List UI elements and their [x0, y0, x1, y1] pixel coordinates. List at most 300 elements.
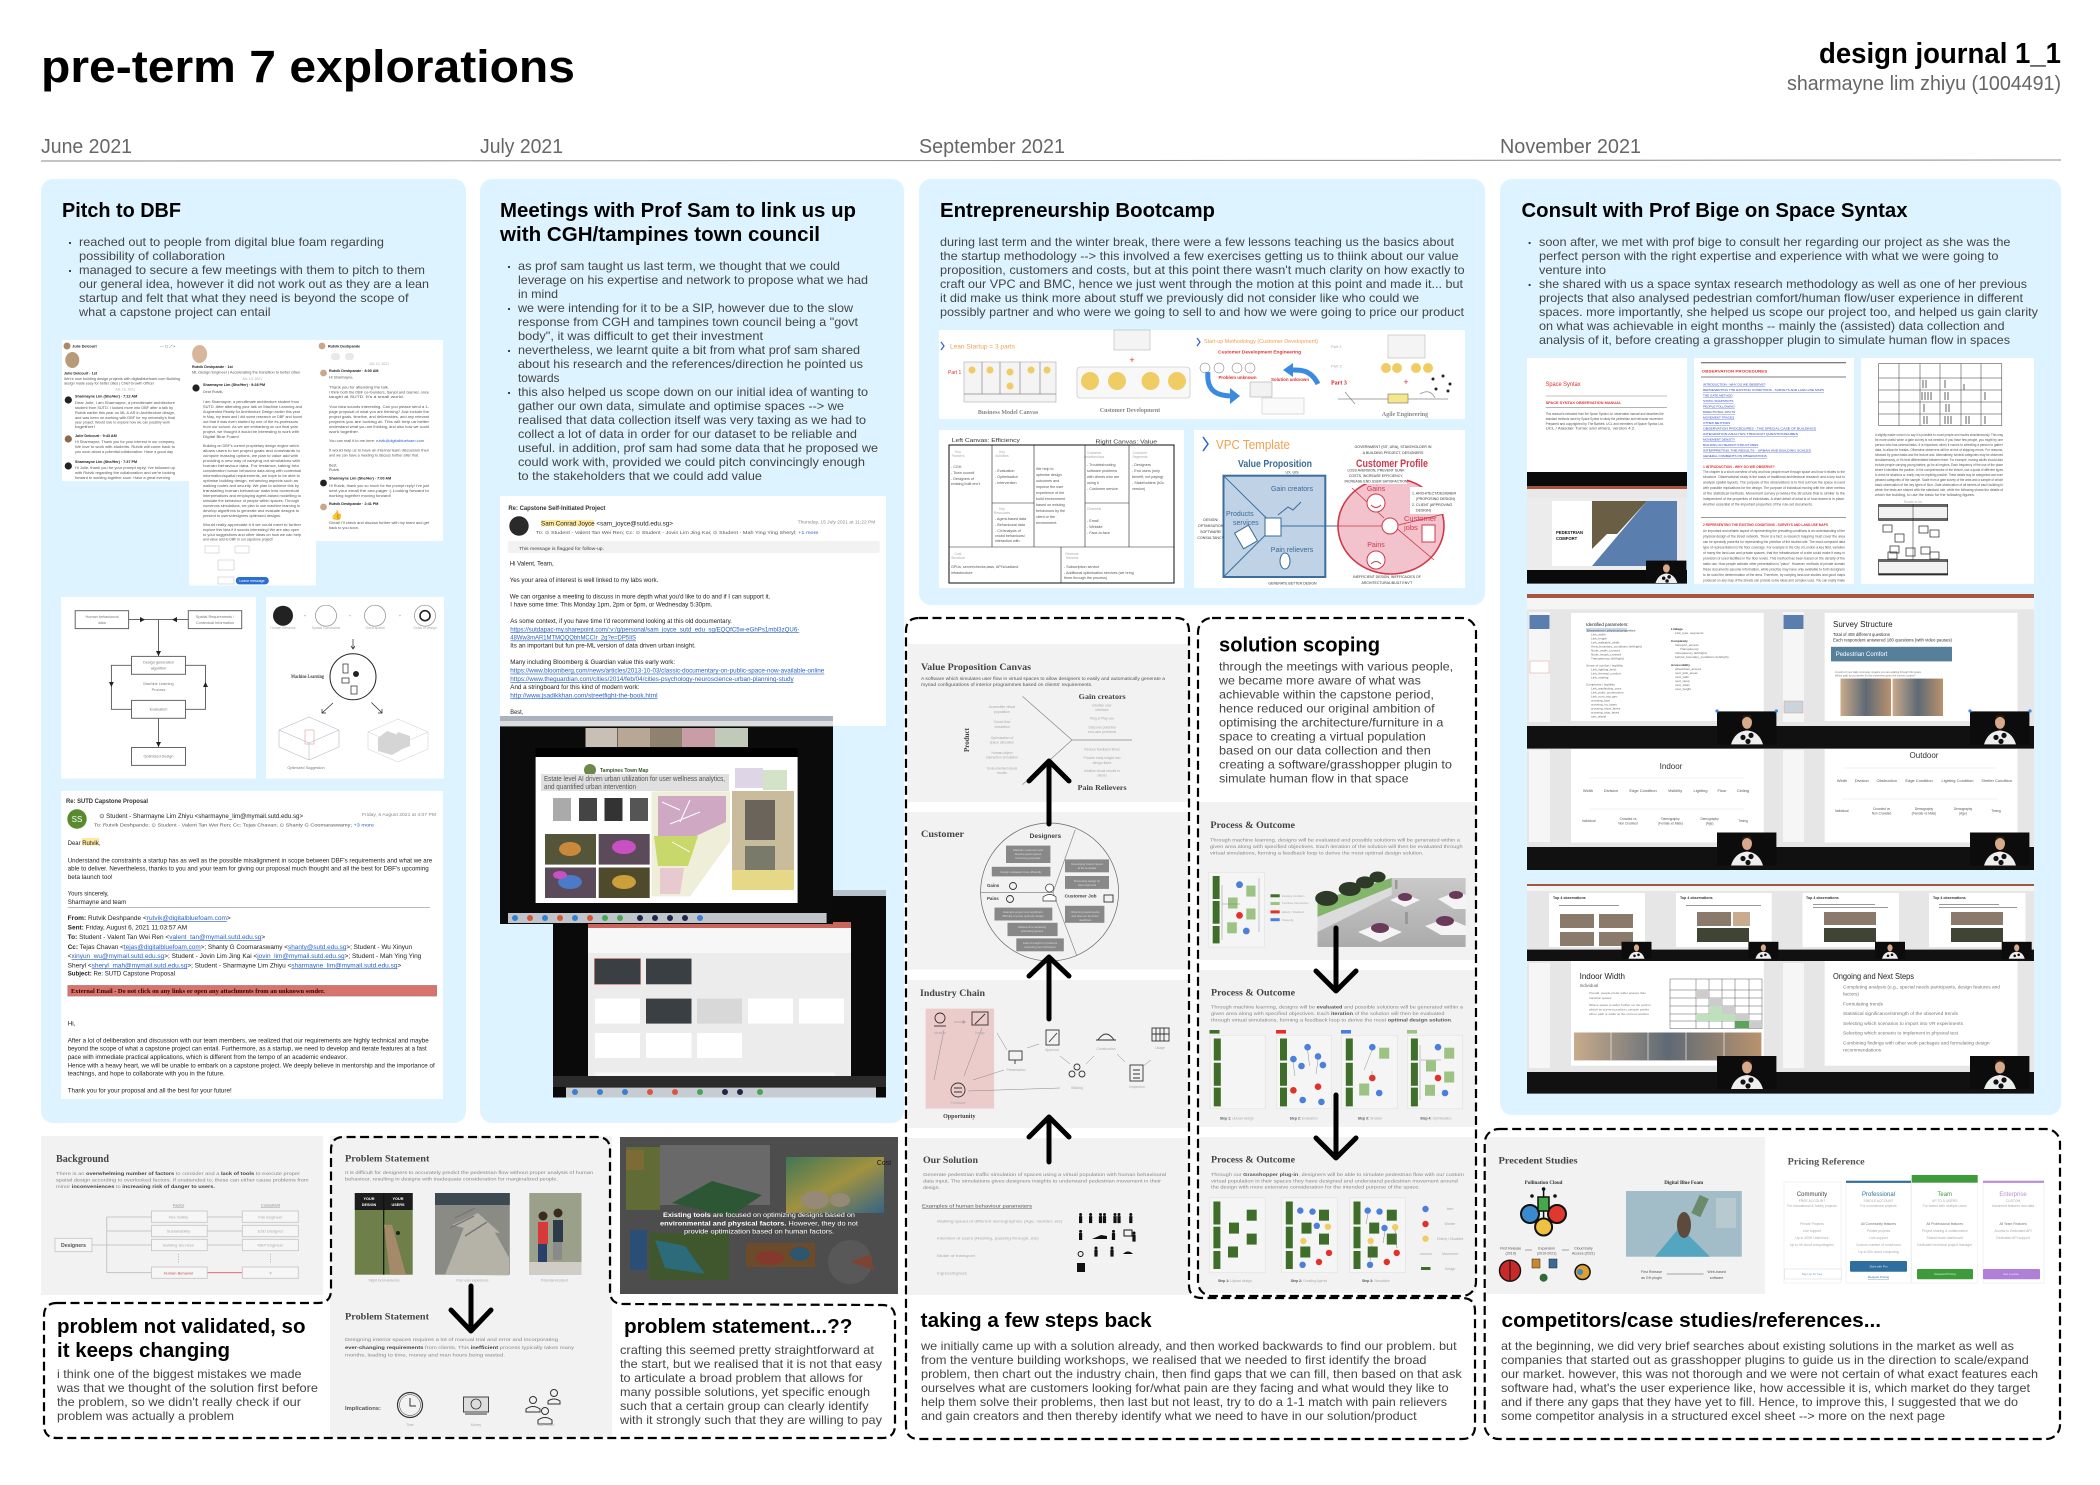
screenshot: zoom meeting Tampines: Tampines Town Map	[600, 768, 648, 774]
slide: problem statement	[330, 1136, 612, 1438]
slide: value proposition canvas template: Products	[1226, 511, 1254, 518]
linkedin message screenshot 2: I am Sharmayne, a penultimate architecture student from	[203, 400, 299, 404]
slide: background: Building Services	[163, 1242, 194, 1248]
email: SUTD Capstone Proposal	[61, 791, 443, 1099]
slide: business model canvas: experience of the	[1036, 491, 1064, 495]
slide: business model canvas: software problems	[1087, 469, 1117, 473]
linkedin message screenshot 2: walking routes and security. We plan to achieve this by	[203, 484, 299, 488]
slide: value proposition canvas template: INEFFICIENT DESIGN, INEFFICACIES OF	[1353, 575, 1421, 579]
timeline: September 2021	[919, 136, 1065, 158]
slide: background: Designers	[61, 1243, 86, 1249]
slide: background: ?	[269, 1270, 272, 1276]
slide: business model canvas: Customer	[1133, 451, 1148, 455]
linkedin message screenshot 2: information/spatial requirements, we hope to be able to	[203, 474, 300, 478]
text block: competitors: some competitor analysis in a structured excel sheet --> more on the next page	[1501, 1409, 1945, 1423]
linkedin message screenshot 3	[316, 340, 443, 541]
text block: problem statement: many possible solutions, yet specific enough	[620, 1385, 870, 1399]
slide: industry chain: Construction	[1096, 1047, 1116, 1051]
slide: value proposition canvas template: Gains	[1367, 486, 1386, 493]
text block: solution scoping: based on our data collection and then	[1219, 744, 1431, 758]
slide: outdoor variables: Division	[1855, 778, 1869, 783]
slide: business model canvas: - Behavioural data	[995, 523, 1026, 527]
text block: taking a few steps back: we initially came up with a solution already, and then worked backwards to find our problem. but	[920, 1339, 1457, 1353]
document: table and plan diagrams: where it identifies the position. In the comprehensive of the lecture, use a quota of different types	[1875, 468, 2003, 472]
email: SUTD Capstone Proposal: Sent: Friday, August 6, 2021 11:03:57 AM	[68, 924, 187, 932]
slide: problem statement: months, leading to time, money and man hours being wasted.	[345, 1352, 505, 1358]
document: space syntax manual cover with presentation: This manual is extracted from the Space Syntax Ltd. observation manual and describes the	[1546, 412, 1664, 416]
document: observation procedures contents: REPRESENTING THE EXISTING CONDITIONS - SURVEYS AND LAND-USE MAPS	[1703, 388, 1824, 392]
email: Capstone Self-Initiated Project: This message is flagged for follow-up.	[519, 546, 604, 552]
document: space syntax manual cover with presentation: Space Syntax	[1546, 382, 1581, 388]
email: Capstone Self-Initiated Project: https://sutdapac-my.sharepoint.com/:v:/g/personal/sam_joyce_sutd_edu_sg/EQQfC5w-eGhPs1mbl3zQU6-	[510, 626, 799, 633]
slide: customer: fixed long proposals	[1016, 856, 1041, 860]
slide: process and outcome 1: Through machine learning, designs will be evaluated and possible solutions will be generated within a	[1210, 837, 1460, 842]
text block: problem statement: with it strongly such that they are willing to pay	[619, 1413, 882, 1427]
bullet text	[508, 259, 878, 483]
slide: value proposition canvas: Plug & Play use	[1090, 716, 1114, 720]
email: SUTD Capstone Proposal: ⊙ Student - Sharmayne Lim Zhiyu <sharmayne_lim@mymail.sutd.edu.sg>	[99, 813, 303, 820]
flowchart: design process: Machine Learning	[143, 682, 174, 686]
slide: process and outcome 3: the design with more extensive consideration for the intended purpose of the space.	[1211, 1185, 1420, 1190]
slide: business model canvas: Revenue	[1065, 552, 1079, 556]
slide: process and outcome 2: Through machine learning, designs will be evaluated and possible solutions will be generated within a	[1211, 1005, 1463, 1010]
slide: identified parameters: Sense of comfort / legibility	[1586, 664, 1623, 668]
slide: value proposition canvas: Product	[963, 727, 971, 752]
slide: existing tools image	[620, 1137, 898, 1294]
linkedin message screenshot 3: understand what you are thinking, and also how we could	[329, 425, 429, 429]
pricing reference: Up to 50h cloud computing	[1858, 1250, 1899, 1254]
slide: precedent studies: software	[1710, 1276, 1723, 1280]
pricing reference: Advanced features and data	[1992, 1204, 2034, 1208]
linkedin message screenshot 3: and we can have a meeting to discuss further after that.	[329, 454, 419, 458]
bullet text: reached out to people from digital blue foam regarding	[79, 235, 384, 249]
slide: value proposition canvas: clients	[1097, 774, 1107, 778]
machine learning diagram: Machine Learning	[291, 675, 324, 680]
email: SUTD Capstone Proposal: Sheryl <sheryl_mah@mymail.sutd.edu.sg>; Student - Sharmayne Lim Zhiyu <sharmayne_lim@mymail.sutd.edu.sg>	[68, 962, 401, 969]
slide: business model canvas: We help to	[1036, 467, 1054, 471]
text block: problem not validated: problem not validated, so	[57, 1316, 306, 1338]
slide: industry chain: Approval	[1045, 1048, 1059, 1052]
pricing reference: Project sharing & collaboration	[1922, 1229, 1968, 1233]
slide: value proposition canvas: simulation	[994, 725, 1010, 729]
document: observation procedures contents: of many the land-use and private spaces, that the infrastructure of a site could make it easy in	[1703, 551, 1845, 555]
document: observation procedures contents: with possible implications for the design. The purpose of individual moving with the other metrics	[1703, 486, 1845, 490]
linkedin message screenshot 2: explore this idea if it sounds interesting! We are also open	[203, 528, 299, 532]
flowchart: design process: Spatial Requirements /	[196, 615, 235, 619]
slide: business model canvas: Key	[999, 450, 1005, 454]
slide: outdoor variables: (Female vs Male)	[1912, 812, 1936, 816]
slide: business model canvas: optimise design	[1036, 473, 1062, 477]
slide: identified parameters: next_height	[1675, 687, 1691, 691]
email: SUTD Capstone Proposal: Re: SUTD Capstone Proposal	[66, 798, 148, 805]
paragraph: possibly partner and who were we going to sell to and how we were going to price our product	[940, 305, 1465, 319]
slide: business model canvas: Segments	[1132, 455, 1148, 459]
slide: process and outcome 1: Passerby	[1282, 918, 1294, 922]
slide: identified parameters: Node_width_crossed	[1591, 648, 1620, 652]
document: table and plan diagrams: person who has several tasks. It is important, when it comes to selecting a person to gather	[1875, 443, 2004, 447]
bullet text: useful. in addition, prof sam had some data that he proposed we	[518, 441, 878, 455]
slide: process and outcome 3: Item	[1447, 1207, 1453, 1211]
linkedin message screenshot 2: translating human behaviour data into numerical	[203, 489, 299, 493]
slide: customer: at the template	[1078, 866, 1097, 870]
paragraph: craft our VPC and BMC, hence we just went through the motion at this point and made it... but	[940, 277, 1464, 291]
slide: identified parameters: Link_seating	[1591, 676, 1609, 680]
slide: background: spatial design according to overlooked factors. If unattended to, these can either cause problems from	[56, 1178, 309, 1184]
slide: value proposition canvas: interface	[1095, 708, 1109, 712]
linkedin message screenshot 2: Dear Rutvik,	[203, 390, 223, 394]
slide: lean startup methodology: +	[1129, 355, 1135, 365]
flowchart: design process: Optimized Design	[144, 754, 173, 758]
slide: value proposition canvas template: SOFTWARE/	[1200, 530, 1221, 534]
slide: our solution: Mode of transport	[937, 1254, 975, 1258]
slide: problem statement: Slight inconvenience	[368, 1278, 400, 1282]
slide: identified parameters: Accessibility	[1671, 663, 1690, 667]
slide: identified parameters: transport_access	[1675, 643, 1699, 647]
slide: customer: difficulty to prove optimum design	[1002, 914, 1044, 918]
linkedin message screenshot 2: allows users to set project goals and constraints to	[203, 449, 300, 453]
email: SUTD Capstone Proposal: beta launch too!	[68, 874, 113, 881]
document: observation procedures contents: these documents assume information, while practice may have only available to both designers	[1703, 568, 1845, 572]
machine learning diagram: +	[304, 614, 307, 618]
slide: outdoor variables	[1835, 751, 2012, 816]
slide: indoor width: transition spaces	[1589, 996, 1612, 1000]
slide: value proposition canvas template: ARCHITECTURAL/BUILT ENV'T	[1362, 581, 1413, 585]
linkedin message screenshot 1: design made easy for better cities | Chief Growth Officer	[64, 382, 155, 386]
bullet text: venture into	[1539, 263, 1606, 277]
slide: business model canvas: Cost	[955, 552, 962, 556]
slide: business model canvas: - CGH	[951, 465, 962, 469]
document: space syntax manual cover with presentation: PEDESTRIAN	[1556, 530, 1583, 535]
pricing reference: Access to Dedicated API	[1994, 1229, 2032, 1233]
pricing reference: Shared team dashboard	[1927, 1236, 1963, 1240]
slide: lean startup methodology: Lean Startup = 3 parts	[950, 344, 1016, 350]
slide: value proposition canvas template: UX, UIS	[1286, 470, 1299, 474]
slide: process and outcome 3: Worker	[1445, 1222, 1456, 1226]
slide: identified parameters: wheelchair_access	[1675, 667, 1702, 671]
slide: business model canvas: - Agent-based data	[995, 517, 1027, 521]
slide: value proposition canvas template: (PROPOSING DESIGN)	[1416, 497, 1455, 501]
slide: lean startup methodology: Customer Development Engineering	[1218, 350, 1301, 356]
slide: our solution: Our Solution	[923, 1155, 978, 1165]
pricing reference: Enterprise	[1999, 1192, 2027, 1198]
document: table and plan diagrams: be more useful when a gate survey is not needed. If you have few people, you might try one	[1875, 438, 2003, 442]
slide: ongoing and next steps: Ongoing and Next Steps	[1833, 972, 1914, 981]
document: table and plan diagrams: data, to allow for breaks. Otherwise observers will be at risk of skipping errors. For reasons,	[1875, 448, 2003, 452]
slide: customer: optimising spaces	[1021, 929, 1044, 933]
slide: indoor variables: Individual	[1582, 819, 1596, 823]
email: Capstone Self-Initiated Project: https://www.bloomberg.com/news/articles/2013-10-03/classic-documentary-on-public-space-now-available-online	[510, 668, 825, 675]
slide: indoor variables: Width	[1583, 788, 1593, 793]
pricing reference: For educational & hobby projects	[1787, 1204, 1837, 1208]
document: observation procedures contents: independent of the properties of individuals. A chart detail of what is of how drawn is in place.	[1703, 497, 1845, 501]
text block: problem statement: crafting this seemed pretty straightforward at	[620, 1343, 875, 1357]
slide: value proposition canvas template: OPTIMISATION	[1198, 524, 1224, 528]
pricing reference: All Team Features	[1999, 1222, 2027, 1226]
paragraph: the startup methodology --> this involved a few exercises getting us to thiink about our value	[940, 249, 1459, 263]
slide: value proposition canvas: Gain creators	[1079, 693, 1126, 701]
pricing reference: FREE ACCOUNT	[1799, 1199, 1825, 1203]
slide: problem statement: Problem Statement	[345, 1311, 429, 1321]
text block: solution scoping: simulate human flow in that space	[1219, 772, 1409, 786]
linkedin message screenshot 2: project, we thought it would be interesting to work with	[203, 430, 299, 434]
slide: business model canvas: outcomes and	[1036, 479, 1059, 483]
slide: business model canvas: Partners	[952, 454, 965, 458]
slide: process and outcome 1: Elderly / Disabled	[1282, 910, 1304, 914]
email: Capstone Self-Initiated Project: Yes your area of interest is well linked to my labs work.	[510, 577, 659, 584]
slide: identified parameters: Transparency (left/right)	[1591, 656, 1624, 660]
linkedin message screenshot 2: numerous simulations, we plan to use machine learning to	[203, 504, 300, 508]
slide: identified parameters: Link_wayfinding_cues	[1591, 686, 1622, 690]
slide: background: ESD Designer	[258, 1228, 284, 1234]
slide: lean startup methodology: Part 3	[1331, 380, 1347, 386]
slide: background: Consultant	[261, 1202, 281, 1208]
slide: business model canvas: - Face-to-face	[1087, 531, 1110, 535]
slide: business model canvas: with clients who are	[1087, 475, 1119, 479]
slide: survey structure: Which path do you prefer for the movement given the current context?	[1835, 674, 1916, 678]
timeline	[41, 136, 2061, 161]
presentation screenshots: survey parameters	[1527, 594, 2034, 870]
bullet text: analysis of it, before creating a grasshopper plugin to simulate human flow in spaces	[1539, 333, 2010, 347]
document: space syntax manual cover with presentation: Prepared and copyrighted by The Bartlett, UCL and members of Space Syntax Ltd.	[1546, 422, 1664, 426]
bullet text	[69, 235, 429, 319]
linkedin message screenshot 2: providing a new way of carrying out simulations with	[203, 459, 300, 463]
bullet text: projects that also analysed pedestrian comfort/human flow/user experience in different	[1539, 291, 2024, 305]
slide: identified parameters: Link_point_construction	[1591, 690, 1624, 694]
bullet text: this also helped us scope down on our initial idea of wanting to	[518, 385, 868, 399]
slide: precedent studies: as GH plugin	[1641, 1276, 1662, 1280]
text block: competitors: competitors/case studies/references...	[1502, 1310, 1881, 1332]
linkedin message screenshot 2: compute massing options, we plan to value add with	[203, 454, 298, 458]
flowchart: design process: Design generation	[143, 660, 174, 664]
subtitle: design journal: design journal 1_1	[1819, 38, 2061, 70]
slide: business model canvas: crowd behaviours/	[995, 534, 1026, 538]
linkedin message screenshot 2: Augmented Reality for Architecture Design earlier this year	[203, 410, 301, 414]
linkedin message screenshot 3: Sharmayne Lim (She/Her) · 7:00 AM	[329, 476, 391, 480]
slide: lean startup methodology: Problem unknown	[1218, 375, 1257, 380]
pricing reference: Custom number of runs/hours	[1856, 1243, 1901, 1247]
bullet text: body", it was difficult to get their investment	[518, 329, 764, 343]
flowchart: design process: algorithm	[151, 666, 166, 670]
slide: value proposition canvas: end-user problems	[1088, 730, 1116, 734]
slide: our solution: data input. The simulations gives designers insights to understand pedestrian movement in their	[923, 1178, 1162, 1184]
email: Capstone Self-Initiated Project: Re: Capstone Self-Initiated Project	[508, 506, 605, 512]
email: SUTD Capstone Proposal: External Email - Do not click on any links or open any attachments from an unknown sender.	[71, 988, 325, 995]
slide: outdoor variables: Width	[1837, 778, 1847, 783]
text block: solution scoping	[1218, 634, 1453, 786]
screenshot: zoom slide deck	[553, 890, 886, 1098]
document: observation procedures contents: MOVEMENT DENSITY	[1703, 438, 1735, 442]
slide: identified parameters: Link_lighting_level	[1591, 668, 1617, 672]
slide: identified parameters: Link_walkable_width	[1591, 640, 1620, 644]
linkedin message screenshot 3: Rutvik Deshpande	[328, 344, 360, 348]
slide: identified parameters: Link_type, segments	[1675, 631, 1704, 635]
slide: process and outcome 3	[1198, 1137, 1476, 1293]
slide: process and outcome 3: Through our Grasshopper plug-in , designers will be able to simulate pedestrian flow with our custom	[1211, 1172, 1464, 1177]
flowchart: design process: Evaluation	[150, 708, 167, 712]
slide: indoor width: Indoor Width	[1580, 972, 1625, 981]
email: Capstone Self-Initiated Project: Many including Bloomberg & Guardian value this early work:	[510, 659, 675, 666]
slide: customer: develop great spaces	[1015, 852, 1042, 856]
text block: taking a few steps back: ourselves what are customers looking for/what pain are they facing and what would they like to	[921, 1381, 1449, 1395]
bullet text: could work with, provided we could pitch convincingly enough	[518, 455, 865, 469]
linkedin message screenshot 2: Sharmayne Lim (She/Her) · 9:28 PM	[203, 383, 265, 387]
slide: value proposition canvas template: GOVERNMENT (SIT, URA), STAKEHOLDER IN	[1355, 445, 1432, 449]
text block: competitors: software had, what's the user experience like, how accessible it is, which market do they target	[1501, 1381, 2031, 1395]
linkedin message screenshot 2: and value add to DBF in our capstone project!	[203, 538, 273, 542]
document: space syntax manual cover with presentation: UCL / Alasdair Turner and others, version 4.2.	[1546, 426, 1636, 430]
slide: lean startup methodology: Part 2	[1331, 364, 1342, 368]
pricing reference	[1765, 1137, 2053, 1294]
slide: value proposition canvas: Discover potential	[1089, 726, 1116, 730]
bullet text: soon after, we met with prof bige to consult her regarding our project as she was the	[1539, 235, 2011, 249]
slide: our solution: Examples of human behaviour parameters	[922, 1204, 1033, 1208]
slide: business model canvas: Key	[955, 450, 961, 454]
text block: competitors	[1501, 1310, 2038, 1423]
machine learning diagram: Good spatial	[365, 626, 385, 630]
email: SUTD Capstone Proposal: able to deliver. Nevertheless, thanks to you and your team for giving our proposal much thought and all the best for DBF's upcoming	[68, 866, 429, 873]
slide: outdoor variables: Demography	[1954, 807, 1973, 811]
slide: value proposition canvas template: COSTS, INCREASE EFFICIENCY,	[1349, 474, 1403, 478]
timeline: June 2021	[41, 136, 132, 158]
slide: process and outcome 3: Movement	[1442, 1252, 1458, 1256]
slide: lean startup methodology: Customer Development	[1100, 408, 1160, 414]
slide: background	[41, 1136, 323, 1295]
email: SUTD Capstone Proposal: SS	[72, 815, 82, 824]
email: Capstone Self-Initiated Project	[500, 496, 886, 726]
slide: outdoor variables: Non Crowded	[1872, 812, 1892, 816]
slide: value proposition canvas template: 1. ARCHITECT/DESIGNER	[1412, 492, 1457, 496]
slide: problem statement: Potential Accident	[541, 1278, 568, 1282]
text block: taking a few steps back: taking a few steps back	[921, 1310, 1153, 1332]
slide: background: There is an overwhelming number of factors to consider and a lack of tools to execute proper	[56, 1171, 300, 1177]
slide: value proposition canvas: Reduce feedback times	[1084, 748, 1120, 752]
email: SUTD Capstone Proposal: Subject: Re: SUTD Capstone Proposal	[68, 971, 175, 978]
linkedin message screenshot 2	[189, 340, 316, 586]
slide: existing tools image: Cost	[877, 1160, 891, 1167]
linkedin message screenshot 1: We love to work with students. Rutvik will come back to	[75, 445, 175, 449]
slide: outdoor variables: Lighting Condition	[1941, 778, 1974, 783]
slide: value proposition canvas template: Pain relievers	[1271, 547, 1314, 554]
pricing reference: Live support	[1869, 1236, 1888, 1240]
bullet text: leverage on his expertise and network to propose what we had	[518, 273, 868, 287]
timeline: July 2021	[480, 136, 563, 158]
paragraph: it did make us think more about stuff we previously did not consider like who could we	[940, 291, 1419, 305]
linkedin message screenshot 3: Thank you for attending the talk.	[329, 386, 389, 390]
slide: precedent studies: First Release	[1641, 1270, 1662, 1274]
slide: business model canvas: Right Canvas: Value	[1096, 440, 1157, 446]
slide: value proposition canvas template: VPC Template	[1216, 437, 1290, 452]
slide: process and outcome 1: given area along with specified objectives. Each iteration of the solution will then be evaluated through	[1210, 844, 1463, 849]
text block: solution scoping: through the meetings with various people,	[1219, 660, 1453, 674]
pricing reference: Professional	[1862, 1192, 1895, 1198]
slide: business model canvas: environment.	[1036, 521, 1057, 525]
slide: identified parameters: next_walk	[1675, 675, 1689, 679]
linkedin message screenshot 1: student from SUTD. I looked more into DBF after a talk by	[75, 406, 173, 410]
email: SUTD Capstone Proposal: Cc: Tejas Chavan <tejas@digitalbluefoam.com>; Shanty G Coomaraswamy <shanty@sutd.edu.sg>; Student - Wu Xinyun	[68, 944, 413, 951]
dashed outline: competitors group	[1485, 1129, 2060, 1439]
linkedin message screenshot 1: Julie Delcourt	[72, 344, 97, 348]
presentation screenshots: observations and next steps: Top 4 observations	[1806, 896, 1839, 900]
slide: problem statement: It is difficult for designers to accurately predict the pedestrian flow without proper analysis of human	[345, 1170, 593, 1176]
linkedin message screenshot 3: Rutvik Deshpande · 8:00 AM	[329, 369, 378, 373]
slide: business model canvas: - Evaluation	[995, 469, 1014, 473]
slide: customer: Pains	[987, 896, 999, 901]
heading: with CGH/tampines town council	[499, 224, 820, 246]
email: SUTD Capstone Proposal: beyond the scope of what a capstone project can entail. Furthermore, as a startup, we need to develop and iterate features at a fast	[68, 1046, 427, 1053]
linkedin message screenshot 3: Rutvik	[329, 468, 339, 472]
machine learning diagram: Human Behavior	[270, 626, 296, 630]
slide: identified parameters: next_ramp	[1675, 679, 1690, 683]
linkedin message screenshot 3: project goals, timeline, and deliverables, and any relevant	[329, 415, 429, 419]
presentation screenshots: observations and next steps	[1527, 884, 2034, 1094]
slide: business model canvas: GPUs, server/checks,laws, API's/cadland	[951, 565, 1018, 569]
slide: lean startup methodology: Solution unknown	[1271, 377, 1309, 382]
slide: process and outcome 2: Step 4: Optimisation	[1420, 1116, 1451, 1120]
slide: value proposition canvas: space allocation	[990, 740, 1014, 744]
slide: process and outcome 2	[1198, 970, 1476, 1127]
document: table and plan diagrams: to check for situations or, easily, may be anything possible. These details may be categorised and more	[1875, 473, 2003, 477]
slide: outdoor variables: Crowded vs	[1873, 807, 1890, 811]
email: SUTD Capstone Proposal: From: Rutvik Deshpande <rutvik@digitalbluefoam.com>	[68, 915, 231, 922]
slide: precedent studies: Expansion	[1538, 1246, 1555, 1250]
document: observation procedures contents: of the statistical methods. Movement survey provides the structure that is similar to the	[1703, 492, 1845, 496]
slide: value proposition canvas template: CONSULTANCY	[1197, 536, 1225, 540]
slide: identified parameters: next_kids_areas	[1675, 671, 1698, 675]
pricing reference: Dedicated API support	[1996, 1236, 2030, 1240]
email: SUTD Capstone Proposal: To: Student - Valent Tan Wei Ren <valent_tan@mymail.sutd.edu.sg>	[68, 934, 265, 941]
slide: business model canvas: based on existing	[1036, 503, 1065, 507]
slide: identified parameters: Transparency	[1680, 647, 1699, 651]
slide: business model canvas: Structure	[951, 556, 965, 560]
pricing reference: Private Projects	[1800, 1222, 1824, 1226]
slide: business model canvas: them through the process)	[1064, 576, 1107, 580]
slide: identified parameters: Area_boundary_conditions (left/right)	[1591, 644, 1642, 648]
paragraph: proposition, customers and costs, but at this point there wasn't much clarity on how exactly to	[940, 263, 1465, 277]
slide: value proposition canvas template: LOSS AVERSION, PREVENT SUNK	[1347, 468, 1405, 472]
slide: customer: Obtaining requirements	[1070, 910, 1100, 914]
slide: identified parameters: Identified parameters:	[1586, 622, 1628, 627]
slide: identified parameters: transparency (left/right)	[1675, 651, 1707, 655]
slide: business model canvas: - Designers of	[951, 477, 975, 481]
email: SUTD Capstone Proposal: Hence with a heavy heart, we will be unable to embark on a capstone project. We deeply believe in mentorship and the importance of	[68, 1062, 435, 1069]
text block: problem not validated: i think one of the biggest mistakes we made	[57, 1367, 302, 1381]
panel: Pitch to DBF	[41, 179, 466, 1123]
linkedin message screenshot 2: JUL 13, 2021	[242, 377, 262, 381]
slide: problem statement: Money	[471, 1423, 481, 1427]
slide: indoor variables: Demography	[1700, 817, 1719, 821]
slide: value proposition canvas: Optimisation of	[991, 736, 1013, 740]
slide: industry chain: Ideation	[934, 1031, 946, 1035]
document: observation procedures contents: OBSERVATION PROCEDURES - THE SPECIAL CASE OF BUILDINGS	[1703, 426, 1816, 430]
linkedin message screenshot 2: human behaviour data. For instance, taking into	[203, 464, 299, 468]
slide: ongoing and next steps: factors)	[1843, 992, 1860, 996]
slide: value proposition canvas: Intuitive user	[1092, 704, 1112, 708]
document: observation procedures contents: Another essential of the important properties of the rule-set documents.	[1703, 502, 1813, 506]
slide: value proposition canvas: myriad configurations of interior programmes based on clients' requirements.	[921, 682, 1092, 687]
icons: time money man hours	[398, 1390, 560, 1424]
slide: business model canvas: using it	[1087, 481, 1099, 485]
slide: customer: Customer Job	[1065, 894, 1097, 898]
text block: competitors: at the beginning, we did very brief searches about existing solutions in the market as well as	[1501, 1339, 2014, 1353]
photo: your design vs your users: YOUR	[364, 1197, 375, 1201]
machine learning diagram: +	[399, 614, 402, 618]
slide: value proposition canvas: Human-object	[991, 751, 1013, 755]
document: observation procedures contents: An important and reliable aspect of representing the prevailing conditions is an understanding of the	[1703, 529, 1845, 533]
email: Capstone Self-Initiated Project: 48Ww3mAR1MTMQQQbhMCCIr_2g?e=DP5IiS	[510, 634, 636, 642]
email: Capstone Self-Initiated Project: Sam Conrad Joyce <sam_joyce@sutd.edu.sg>	[541, 520, 673, 528]
slide: identified parameters: Complexity	[1671, 639, 1688, 643]
pricing reference: Up to 200K Units/hour	[1795, 1236, 1830, 1240]
